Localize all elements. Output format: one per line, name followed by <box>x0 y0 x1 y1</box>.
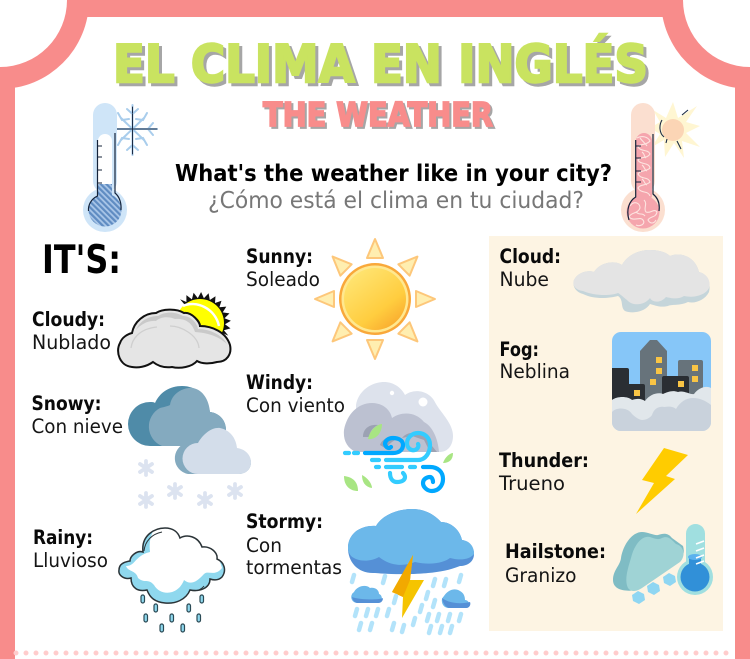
icon: sun <box>315 239 435 359</box>
label: Hailstone: Granizo <box>505 564 576 587</box>
label: Stormy <box>246 510 342 579</box>
label: Thunder: Trueno <box>498 472 565 495</box>
bottom dotted line <box>16 650 735 656</box>
subtitle: THE WEATHER <box>265 97 495 136</box>
icon: snow clouds <box>128 386 251 507</box>
label: Hailstone: Hailstone: <box>505 540 606 563</box>
label: Snowy: Con nieve <box>32 415 123 438</box>
label: Thunder: Thunder: <box>499 449 589 472</box>
label: Windy: Windy: <box>246 371 313 394</box>
icon: storm cloud <box>348 509 474 633</box>
label: Fog: Fog: <box>500 338 539 361</box>
label: Snowy <box>32 392 123 438</box>
label: Rainy: Rainy: <box>33 526 93 549</box>
label: Cloudy: Nublado <box>32 331 111 354</box>
label: Stormy: Con <box>246 534 282 557</box>
label: Snowy: Snowy: <box>32 392 102 415</box>
label: Sunny: Soleado <box>246 268 320 291</box>
icon: rain cloud <box>119 524 224 632</box>
label: Cloud <box>500 245 561 291</box>
label: Cloudy: Cloudy: <box>32 308 105 331</box>
question in Spanish: ¿Cómo está el clima en tu ciudad? <box>208 186 584 214</box>
label: Hailstone <box>505 540 606 587</box>
label: Windy: Con viento <box>246 394 345 417</box>
label: Thunder <box>498 449 589 495</box>
icon: cold thermometer with snowflake <box>83 103 157 232</box>
icon: lightning bolt <box>636 448 688 514</box>
icon: cloud with sun <box>118 292 231 368</box>
panel: vocabulary background <box>489 236 723 631</box>
subtitle: THE WEATHER <box>263 95 493 134</box>
label: Sunny: Sunny: <box>246 245 313 268</box>
icon: wind and cloud <box>344 382 453 491</box>
heading: IT'S: IT'S: <box>42 238 121 283</box>
label: Fog <box>500 338 570 383</box>
label: Rainy: Lluvioso <box>33 549 108 572</box>
label: Cloudy <box>32 308 111 354</box>
icon: cloud <box>573 250 710 312</box>
question in English: What's the weather like in your city? <box>175 159 612 187</box>
icon: hail cloud and thermometer <box>613 524 713 604</box>
title: EL CLIMA EN INGLÉS <box>113 34 648 95</box>
label: Stormy: tormentas <box>246 556 342 579</box>
label: Windy <box>246 371 345 417</box>
title: EL CLIMA EN INGLÉS <box>116 37 651 98</box>
label: Cloud: Nube <box>500 268 549 291</box>
label: Cloud: Cloud: <box>500 245 561 268</box>
icon: foggy city <box>612 332 711 431</box>
label: Stormy: Stormy: <box>246 510 323 533</box>
icon: hot thermometer with sun <box>621 102 700 232</box>
label: Rainy <box>33 526 108 572</box>
label: Fog: Neblina <box>500 360 570 383</box>
label: Sunny <box>246 245 320 291</box>
